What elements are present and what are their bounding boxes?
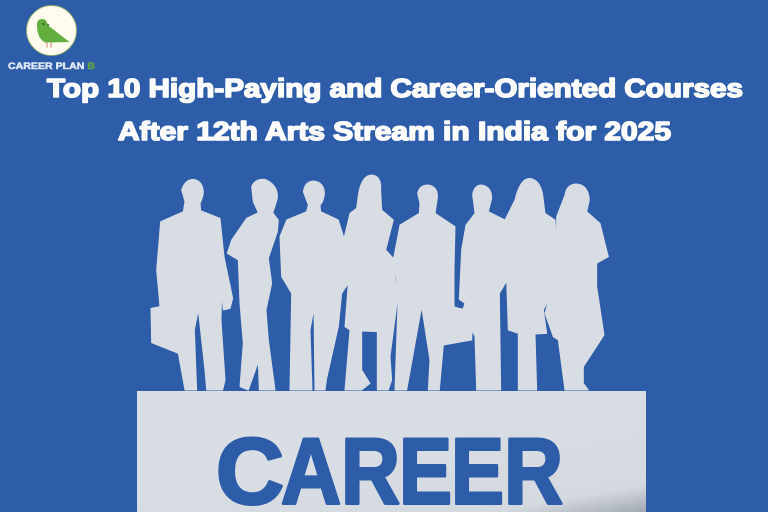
- person 5: [393, 185, 473, 390]
- platform block: [137, 391, 646, 512]
- platform: [137, 391, 646, 512]
- title line 2: After 12th Arts Stream in India for 2025: [118, 116, 671, 146]
- logo: Career Plan B: [8, 6, 95, 72]
- silhouettes: group of eight professionals: [151, 175, 608, 390]
- person 2: [227, 179, 278, 390]
- platform word: CAREER: [216, 418, 563, 512]
- logo circle: [26, 6, 76, 56]
- person 7: [505, 178, 563, 390]
- person 6: [459, 185, 507, 390]
- icon: green bird: [37, 19, 70, 48]
- title line 1: Top 10 High-Paying and Career-Oriented Courses: [47, 73, 743, 103]
- person 1 with briefcase: [151, 179, 233, 390]
- person 3: [280, 181, 353, 390]
- title: [47, 73, 743, 146]
- person 8: [545, 184, 608, 390]
- logo wordmark: CAREER PLAN B: [8, 61, 95, 72]
- person 4: [344, 175, 398, 390]
